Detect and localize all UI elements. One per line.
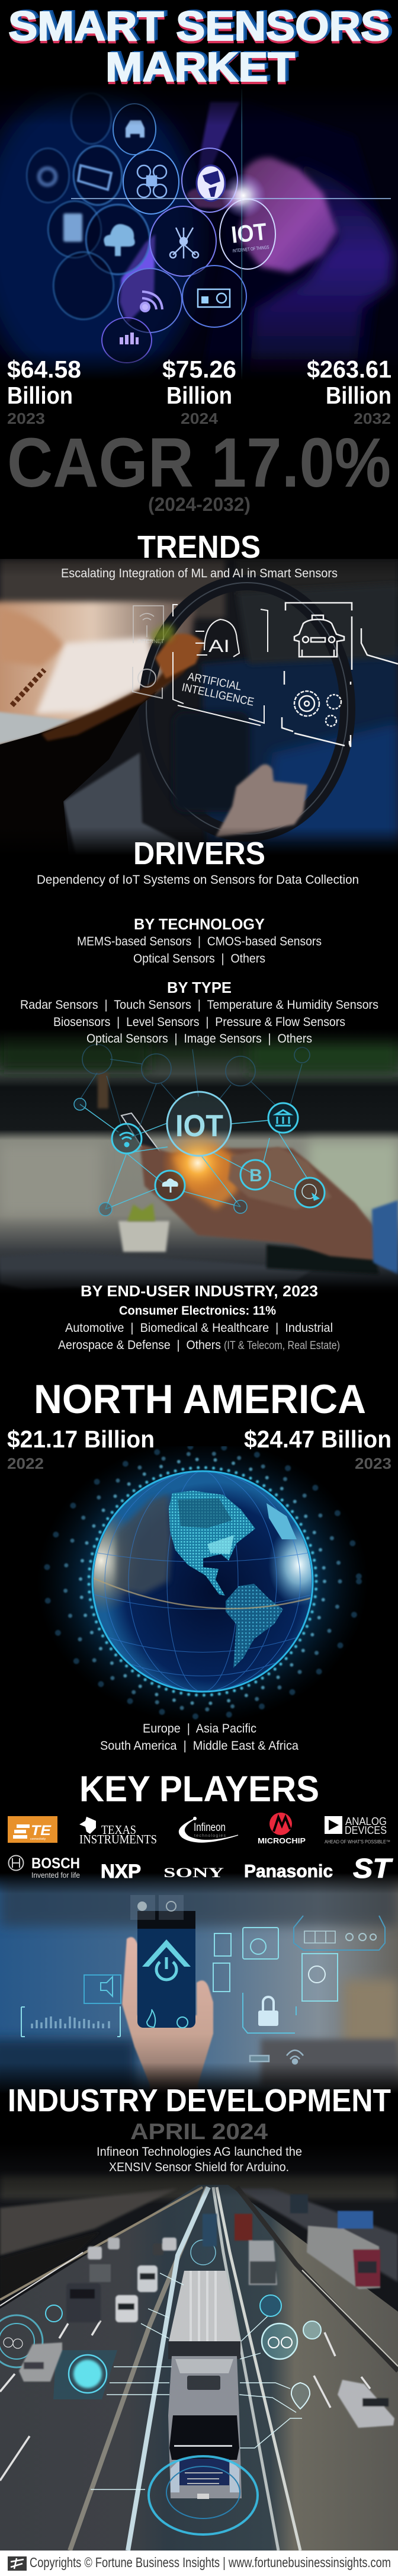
HUD: gears panel bbox=[282, 671, 351, 747]
heading: trends: TRENDS bbox=[137, 529, 261, 565]
plant pot bbox=[118, 1203, 169, 1252]
CAGR period: (2024-2032) bbox=[148, 494, 251, 515]
icon: bar chart bbox=[120, 333, 139, 344]
logo: NXP: NXP bbox=[101, 1861, 141, 1882]
logo: Infineon: technologies bbox=[194, 1834, 226, 1838]
logo: Bosch: Invented for life bbox=[31, 1871, 80, 1880]
segment: by type: Radar Sensors | Touch Sensors | Temperature & Humidity Sensors bbox=[20, 998, 378, 1012]
stat: north america 2022: 2022 bbox=[7, 1455, 44, 1472]
title: MARKET bbox=[105, 44, 295, 90]
icon: cloud upload bbox=[155, 1171, 185, 1200]
segment: by technology bbox=[77, 915, 322, 966]
logo: Texas Instruments: INSTRUMENTS bbox=[79, 1832, 157, 1846]
continent: North America bbox=[169, 1491, 255, 1580]
sensor badge: radar on road bbox=[191, 2240, 216, 2265]
stat: 2032: $263.61 bbox=[307, 356, 391, 383]
globe with digital map bbox=[37, 1439, 368, 1724]
icon: people nodes bbox=[74, 1098, 247, 1216]
sensor ring inner bbox=[166, 2466, 240, 2519]
stat: 2023: $64.58 bbox=[7, 356, 81, 383]
region list: Europe | Asia Pacific bbox=[143, 1722, 256, 1736]
icon: monitor bbox=[78, 165, 111, 190]
stat: north america 2023: 2023 bbox=[355, 1455, 391, 1472]
icon: tablet bbox=[63, 213, 82, 242]
highway image: connected truck fleet bbox=[0, 2144, 398, 2551]
title: SMART SENSORS bbox=[8, 3, 390, 49]
icon: bitcoin bbox=[240, 1160, 270, 1190]
stat: 2023 bbox=[7, 356, 81, 427]
logos row one bbox=[8, 1813, 390, 1846]
sensor badge: person bbox=[53, 2350, 117, 2399]
HUD: AI text: INTELLIGENCE bbox=[181, 681, 255, 709]
footer bbox=[0, 2551, 398, 2576]
icon: globe bbox=[197, 165, 225, 201]
stat: north america 2023 bbox=[244, 1426, 391, 1472]
logo: Analog Devices bbox=[325, 1816, 390, 1845]
HUD: AI text: ARTIFICIAL bbox=[187, 670, 242, 693]
date: April 2024: APRIL 2024 bbox=[130, 2120, 268, 2144]
sensor badge: pair of bicycles bbox=[262, 2321, 321, 2359]
heading: north america: NORTH AMERICA bbox=[34, 1376, 366, 1422]
particle halo bbox=[46, 1446, 359, 1717]
logo: Bosch bbox=[8, 1855, 80, 1880]
logo: Bosch: BOSCH bbox=[31, 1855, 80, 1872]
title bbox=[8, 3, 390, 90]
sensor badge: pin bbox=[291, 2383, 310, 2409]
stat: 2024: $75.26 bbox=[162, 356, 236, 383]
sensor badge: small car bbox=[260, 2295, 281, 2316]
IoT image: hands on phone with network overlay bbox=[0, 1028, 398, 1295]
vehicles bbox=[19, 2194, 394, 2428]
icon: wifi bbox=[141, 292, 162, 311]
lock icon bbox=[258, 1997, 278, 2026]
HUD: AI text: AI bbox=[208, 637, 230, 656]
trends image: driver with AI dashboard overlay bbox=[0, 559, 398, 855]
stat: 2024 bbox=[162, 356, 236, 427]
grid bbox=[94, 1471, 313, 1692]
icon: dashboard bbox=[198, 289, 230, 307]
icon: faded top nodes bbox=[82, 1044, 310, 1086]
segment: by end-user industry: BY END-USER INDUSTRY, 2023 bbox=[81, 1282, 318, 1300]
icon: bitcoin: B bbox=[249, 1166, 262, 1185]
logo: Microchip: MICROCHIP bbox=[258, 1836, 306, 1845]
segment: by type: BY TYPE bbox=[167, 979, 232, 996]
stat: north america 2022: $21.17 Billion bbox=[7, 1426, 155, 1453]
smart home image bbox=[0, 1873, 398, 2098]
logo: Analog Devices: AHEAD OF WHAT'S POSSIBLE™ bbox=[325, 1839, 390, 1845]
stat: 2024: Billion bbox=[166, 382, 232, 409]
logos row two bbox=[8, 1853, 393, 1884]
stat: 2032: Billion bbox=[326, 382, 391, 409]
HUD: AI panel bbox=[173, 605, 268, 726]
stat: 2032 bbox=[307, 356, 391, 427]
continent: Central America bbox=[206, 1575, 225, 1596]
segment: by type bbox=[20, 979, 378, 1046]
sensor badge: small dial bbox=[46, 2305, 62, 2322]
sensor badge: bike bbox=[0, 2315, 43, 2367]
HUD: car panel bbox=[285, 603, 398, 670]
segment: by end-user industry: (IT & Telecom, Real Estate) bbox=[224, 1340, 340, 1352]
HUD: internet panel: INTERNET bbox=[137, 638, 165, 644]
heading: drivers: DRIVERS bbox=[133, 836, 265, 871]
logo: Panasonic: Panasonic bbox=[244, 1861, 333, 1881]
IOT badge bbox=[232, 223, 269, 253]
region list bbox=[100, 1722, 298, 1753]
segment: by type: Optical Sensors | Image Sensors | Others bbox=[86, 1032, 312, 1046]
icon: cloud bbox=[104, 224, 135, 256]
continent: Greenland and Europe bbox=[267, 1503, 297, 1539]
IOT badge: IOT bbox=[230, 219, 268, 248]
icon: Fortune Business Insights logo bbox=[8, 2556, 27, 2571]
heading: key players: KEY PLAYERS bbox=[79, 1769, 319, 1809]
icon: car bbox=[126, 120, 145, 138]
stat: 2024: 2024 bbox=[181, 410, 219, 427]
stat: 2032: 2032 bbox=[354, 410, 391, 427]
road surface bbox=[0, 2185, 398, 2551]
laptop bbox=[0, 1252, 314, 1289]
drivers text: Dependency of IoT Systems on Sensors for Data Collection bbox=[37, 873, 359, 887]
icon: drone bbox=[137, 165, 166, 197]
icon: wifi bbox=[112, 1124, 142, 1153]
icon: bank bbox=[268, 1103, 298, 1133]
hero image: hand touching hexagon IoT sphere bbox=[0, 83, 398, 391]
logo: Analog Devices: DEVICES bbox=[345, 1824, 387, 1836]
arm in sleeve bbox=[0, 691, 158, 855]
HUD: AI text bbox=[182, 640, 254, 706]
touch light flare bbox=[71, 89, 391, 379]
network lines bbox=[80, 1104, 308, 1209]
logo: Infineon: Infineon bbox=[194, 1821, 226, 1834]
segment: by type: Biosensors | Level Sensors | Pressure & Flow Sensors bbox=[53, 1015, 345, 1029]
icon: web cursor bbox=[295, 1178, 325, 1207]
segment: by end-user industry: Automotive | Biomedical & Healthcare | Industrial bbox=[65, 1321, 333, 1335]
main truck cab bbox=[168, 2356, 242, 2499]
logo: Texas Instruments: TEXAS bbox=[101, 1823, 136, 1837]
logo: Analog Devices: ANALOG bbox=[345, 1816, 387, 1827]
logo: TE Connectivity: connectivity bbox=[30, 1837, 46, 1841]
segment: by technology: MEMS-based Sensors | CMOS-based Sensors bbox=[77, 935, 322, 948]
continent: South America bbox=[226, 1584, 283, 1668]
hands bbox=[267, 1245, 379, 1274]
steering wheel bbox=[146, 583, 348, 834]
trends text: Escalating Integration of ML and AI in Smart Sensors bbox=[61, 567, 338, 580]
main truck trailer bbox=[168, 2271, 240, 2359]
stat: north america 2023: $24.47 Billion bbox=[244, 1426, 391, 1453]
icon: network node bbox=[170, 228, 198, 258]
hexagon icon ring bbox=[27, 93, 275, 363]
equator ring bbox=[90, 1577, 311, 1609]
icon: IOT globe: IOT bbox=[175, 1109, 223, 1143]
stat: 2023: 2023 bbox=[7, 410, 45, 427]
highway text band bbox=[97, 2120, 302, 2174]
stat: north america 2022 bbox=[7, 1426, 155, 1472]
region list: South America | Middle East & Africa bbox=[100, 1739, 298, 1753]
logo: TE Connectivity: TE bbox=[31, 1823, 52, 1839]
phone bbox=[121, 1113, 172, 1177]
audio level bars bbox=[32, 2016, 109, 2028]
wifi and router icons bbox=[250, 2050, 303, 2064]
icon: gear bbox=[39, 168, 56, 185]
logo: TE Connectivity bbox=[8, 1816, 57, 1843]
development text: XENSIV Sensor Shield for Arduino. bbox=[109, 2160, 289, 2174]
segment: by end-user industry: Consumer Electronics: 11% bbox=[119, 1304, 276, 1318]
segment: by end-user industry: Aerospace & Defense | Others bbox=[58, 1338, 221, 1352]
icon: IOT globe bbox=[167, 1092, 231, 1156]
segment: by technology: BY TECHNOLOGY bbox=[134, 915, 265, 933]
road barriers bbox=[0, 2187, 398, 2551]
panel area: dashboard bbox=[63, 753, 193, 851]
segment: by end-user industry bbox=[58, 1282, 340, 1352]
hand holding phone bbox=[122, 1911, 213, 2098]
segment: by technology: Optical Sensors | Others bbox=[133, 952, 265, 966]
IOT badge: INTERNET OF THINGS bbox=[232, 245, 269, 254]
logo: Microchip bbox=[258, 1813, 306, 1845]
hand on wheel bbox=[216, 765, 307, 837]
stat: 2023: Billion bbox=[7, 382, 73, 409]
logo: Infineon bbox=[179, 1817, 238, 1842]
lane dashes bbox=[0, 2321, 370, 2481]
development text bbox=[97, 2145, 302, 2174]
HUD: internet panel bbox=[133, 606, 165, 698]
data link lines bbox=[91, 2273, 302, 2489]
logo: Texas Instruments bbox=[79, 1817, 157, 1846]
smart home icons bbox=[21, 1895, 385, 2037]
development text: Infineon Technologies AG launched the bbox=[97, 2145, 302, 2159]
logo: ST: ST bbox=[353, 1853, 393, 1884]
logo: Sony: SONY bbox=[163, 1865, 224, 1880]
sensor ring bbox=[149, 2456, 258, 2535]
